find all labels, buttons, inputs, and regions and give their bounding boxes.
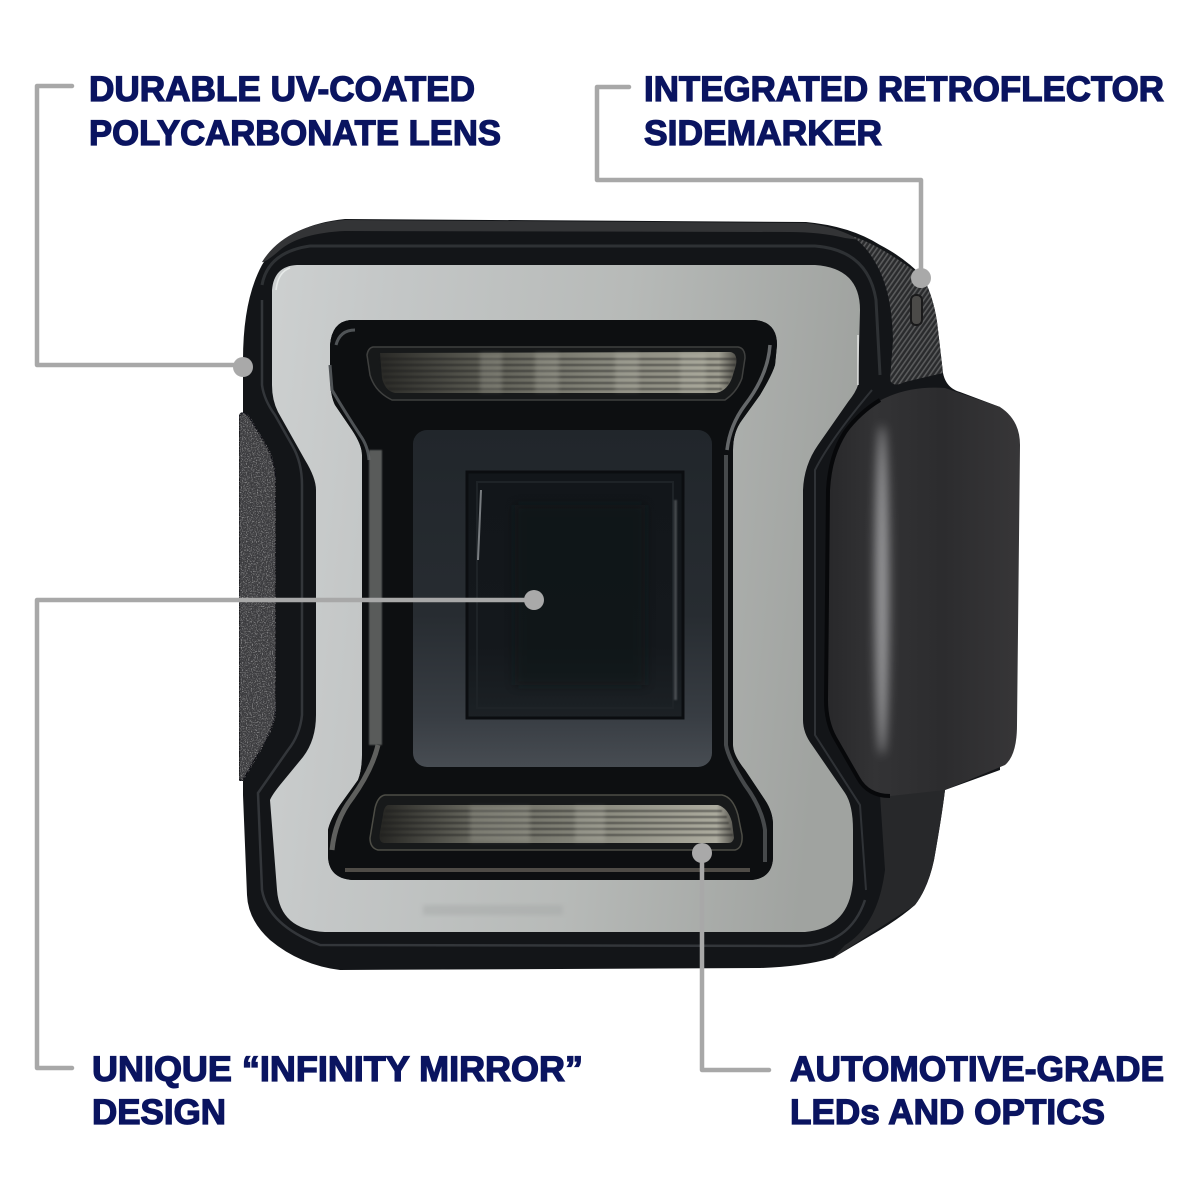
central mirror panel <box>413 430 712 767</box>
leader line <box>37 86 243 365</box>
marker dot <box>233 357 253 377</box>
label: POLYCARBONATE LENS <box>89 113 501 153</box>
bottom LED bar <box>370 795 742 850</box>
housing silhouette <box>243 219 1000 970</box>
label <box>644 69 1164 153</box>
pad edge <box>826 400 890 796</box>
glass reflections <box>330 330 770 870</box>
product photo: tail light <box>239 219 1020 970</box>
pad highlight <box>875 425 889 755</box>
left textured side piece <box>239 413 276 781</box>
lower housing <box>833 790 945 958</box>
leader line <box>37 600 534 1068</box>
label: UNIQUE “INFINITY MIRROR” <box>92 1049 583 1089</box>
leader line <box>702 853 769 1070</box>
carbon texture side band <box>852 236 943 385</box>
label <box>89 69 501 153</box>
moulded part number <box>423 905 563 915</box>
label: INTEGRATED RETROFLECTOR <box>644 69 1164 109</box>
label: DESIGN <box>92 1092 226 1132</box>
left bezel band <box>258 300 865 946</box>
leader line <box>597 87 921 277</box>
label: LEDs AND OPTICS <box>790 1092 1105 1132</box>
marker dot <box>524 590 544 610</box>
callout: infinity mirror <box>37 590 583 1132</box>
callout: retroflector sidemarker <box>597 69 1164 288</box>
top rim <box>262 220 860 262</box>
marker dot <box>911 268 931 288</box>
label: DURABLE UV-COATED <box>89 69 475 109</box>
right pad <box>826 388 1020 796</box>
inner dark cavity <box>328 320 777 880</box>
label <box>790 1049 1164 1132</box>
label: SIDEMARKER <box>644 113 882 153</box>
illuminated ring <box>270 265 860 932</box>
marker dot <box>692 843 712 863</box>
callout: durable lens <box>37 69 501 377</box>
retroflector sidemarker <box>911 295 922 325</box>
top LED bar <box>367 347 745 400</box>
label: AUTOMOTIVE-GRADE <box>790 1049 1164 1089</box>
right bezel band <box>815 390 872 890</box>
ring gloss edge <box>276 268 858 385</box>
label <box>92 1049 583 1132</box>
infinity mirror core <box>467 472 683 718</box>
callout: LEDs and optics <box>692 843 1164 1132</box>
lens bezel highlights <box>262 246 880 375</box>
